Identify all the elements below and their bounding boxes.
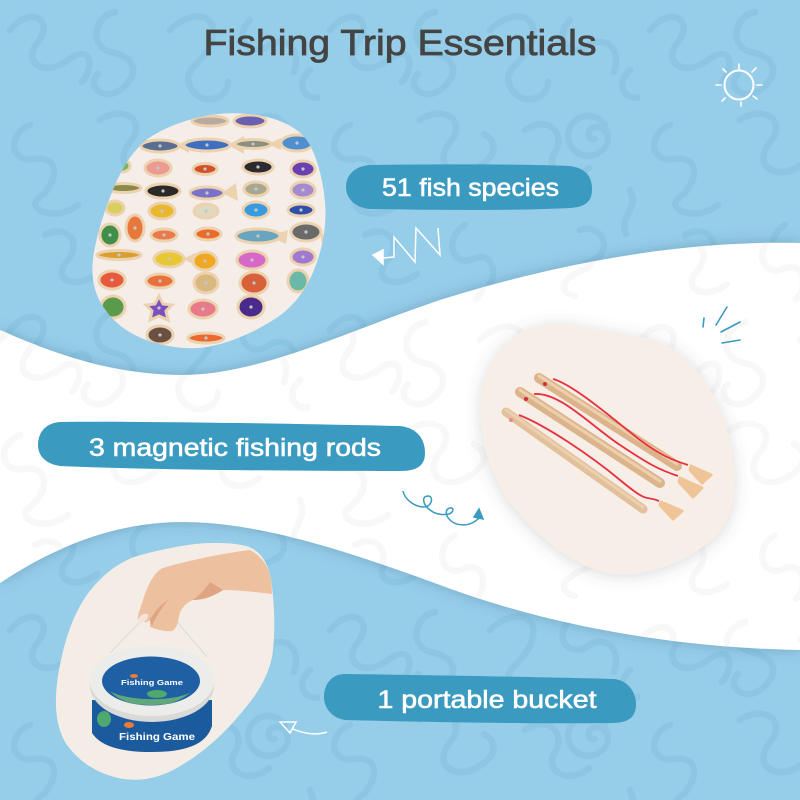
title: Fishing Trip Essentials: [204, 22, 596, 63]
pill: 1 portable bucket: [324, 674, 636, 723]
pill: 3 magnetic fishing rods: [38, 422, 425, 471]
panel: fish species blob: [92, 113, 326, 348]
white wave panel: [0, 237, 800, 655]
icon: sun: [716, 64, 762, 106]
panel: fishing rods blob: [481, 324, 734, 574]
bucket handle string: [110, 622, 207, 657]
fish magnets: [97, 115, 321, 344]
fish tails and fins: [180, 136, 324, 264]
arrow: curved left: [280, 722, 327, 734]
arrow: curly: [403, 491, 483, 525]
bucket side label: Fishing Game: [119, 731, 195, 743]
arrow: zigzag: [373, 228, 440, 264]
corks: [660, 466, 711, 519]
pill: 3 magnetic fishing rods: 3 magnetic fishing rods: [89, 434, 381, 462]
hand and arm: [138, 550, 272, 631]
icon: sparkle lines: [703, 307, 740, 343]
pill: 51 fish species: 51 fish species: [382, 174, 559, 202]
pill: 51 fish species: [346, 164, 592, 210]
bucket lid label: Fishing Game: [121, 680, 183, 687]
magnet dots: [108, 141, 308, 340]
red lines: [519, 379, 688, 501]
panel: bucket blob: [56, 543, 274, 780]
rods: [506, 376, 677, 509]
bucket: [90, 646, 214, 752]
pill: 1 portable bucket: 1 portable bucket: [378, 686, 597, 714]
